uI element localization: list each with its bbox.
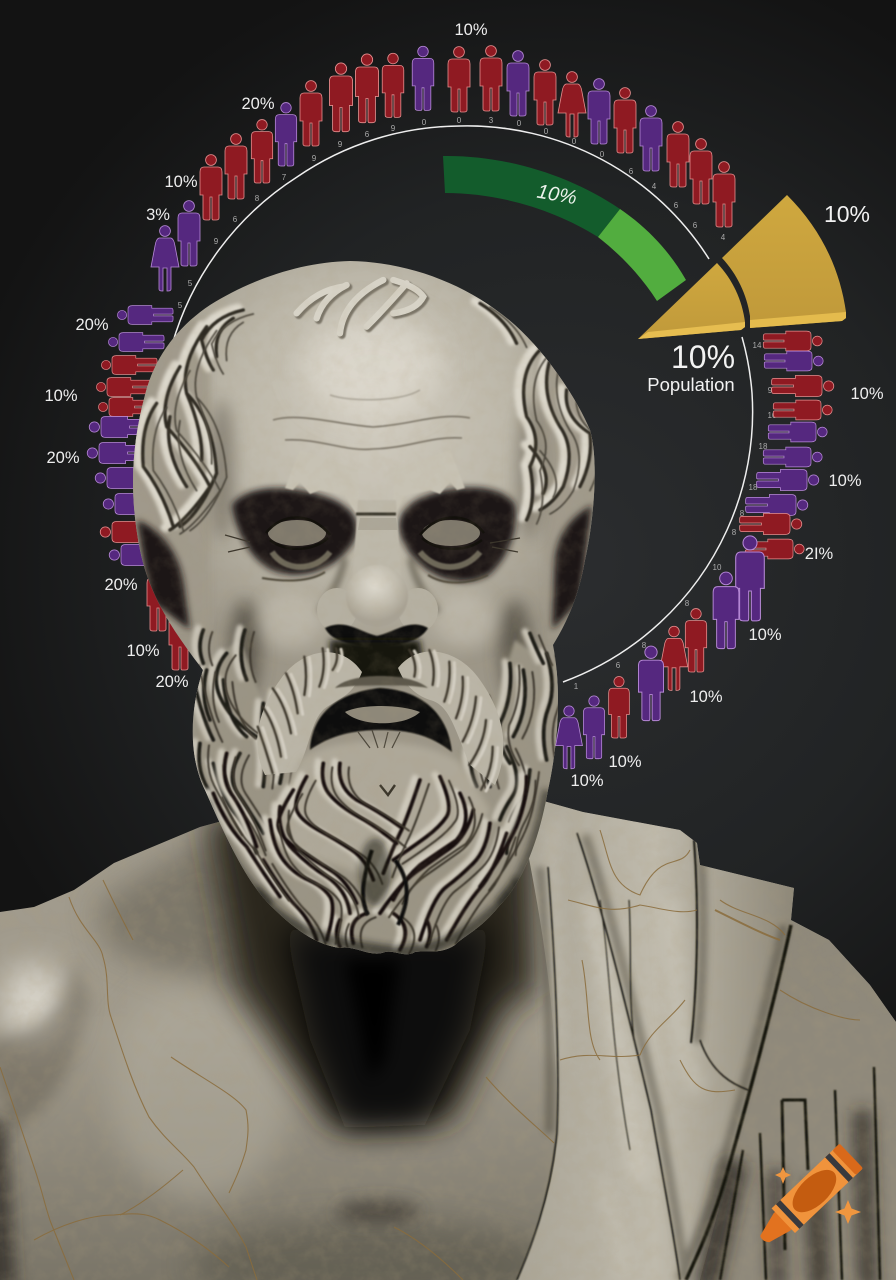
icon: crayon logo [751, 1144, 863, 1252]
small tick numbers: 10 [713, 563, 722, 572]
nose [317, 500, 438, 648]
small tick numbers: 9 [214, 237, 219, 246]
small tick numbers: 3 [489, 116, 494, 125]
head and beard [133, 261, 595, 954]
small tick numbers: 9 [338, 140, 343, 149]
marble veins [0, 830, 860, 1280]
small tick numbers: 8 [732, 528, 737, 537]
population label: Population [647, 374, 735, 395]
torso shading [0, 840, 550, 1280]
small tick numbers: 18 [749, 483, 758, 492]
percentage labels: 20% [104, 576, 138, 594]
toga speckle texture [528, 834, 880, 1280]
toga drapery [516, 802, 896, 1280]
percentage labels [44, 21, 884, 790]
small tick numbers: 9 [312, 154, 317, 163]
small tick numbers: 7 [282, 173, 287, 182]
people figures: left side [87, 306, 191, 670]
percentage labels: 10% [824, 201, 870, 227]
small tick numbers: 0 [517, 119, 522, 128]
small tick numbers: 1 [574, 682, 579, 691]
percentage labels: 20% [155, 673, 189, 691]
green arc segment [443, 156, 686, 301]
percentage labels: 10% [164, 173, 198, 191]
small tick numbers: 8 [642, 641, 647, 650]
torso speckle texture [0, 1002, 494, 1280]
toga fold lines [517, 833, 880, 1280]
brow highlights [284, 481, 466, 514]
percentage labels: 10% [608, 753, 642, 771]
percentage labels: 10% [126, 642, 160, 660]
small tick numbers: 6 [674, 201, 679, 210]
percentage labels: 3% [146, 206, 170, 224]
eyes [225, 517, 520, 583]
small tick numbers: 6 [629, 167, 634, 176]
small tick numbers: 0 [600, 150, 605, 159]
crayon body [751, 1144, 863, 1252]
small tick numbers: 14 [753, 341, 762, 350]
small tick numbers [178, 116, 777, 691]
population label: 10% [671, 339, 735, 375]
mustache [257, 648, 503, 791]
small tick numbers: 9 [391, 124, 396, 133]
green arc segment: 10% [535, 181, 578, 209]
torso [0, 802, 896, 1280]
hair tuft on crown [297, 280, 425, 335]
small tick numbers: 0 [572, 137, 577, 146]
small tick numbers: 8 [740, 509, 745, 518]
percentage labels: 10% [748, 626, 782, 644]
small tick numbers: 18 [759, 442, 768, 451]
small tick numbers: 4 [652, 182, 657, 191]
people figures: right side [556, 331, 834, 769]
small tick numbers: 8 [255, 194, 260, 203]
percentage labels: 20% [75, 316, 109, 334]
mouth [310, 676, 452, 752]
small tick numbers: 8 [685, 599, 690, 608]
small tick numbers: 9 [768, 386, 773, 395]
sparkle small [775, 1167, 791, 1184]
eye sockets [232, 487, 516, 581]
chin [275, 730, 490, 880]
neck shadow [205, 815, 535, 1128]
circle outline [172, 126, 753, 682]
percentage labels: 10% [454, 21, 488, 39]
people figures: top arc [151, 46, 735, 291]
percentage labels: 10% [44, 387, 78, 405]
small tick numbers: 6 [616, 661, 621, 670]
marble bust [0, 261, 896, 1280]
sparkle large [835, 1200, 861, 1224]
hair locks [138, 301, 601, 534]
small tick numbers: 5 [178, 301, 183, 310]
percentage labels: 10% [850, 385, 884, 403]
percentage labels: 10% [570, 772, 604, 790]
small tick numbers: 0 [457, 116, 462, 125]
forehead wrinkles [273, 390, 470, 449]
small tick numbers: 0 [544, 127, 549, 136]
side beard locks [185, 628, 561, 855]
small tick numbers: 6 [693, 221, 698, 230]
small tick numbers: 4 [721, 233, 726, 242]
beard base [195, 640, 560, 960]
percentage labels: 20% [241, 95, 275, 113]
percentage labels: 2I% [805, 545, 834, 563]
population label [647, 339, 735, 395]
marble speckle texture [144, 290, 591, 948]
gold pie wedges [638, 195, 846, 339]
dark recesses beside the head [137, 505, 592, 630]
percentage labels: 10% [689, 688, 723, 706]
lower beard locks [205, 751, 548, 954]
percentage labels: 20% [46, 449, 80, 467]
small tick numbers: 5 [188, 279, 193, 288]
small tick numbers: 10 [768, 411, 777, 420]
small tick numbers: 0 [422, 118, 427, 127]
toga fold shadows [540, 835, 784, 1280]
small tick numbers: 6 [233, 215, 238, 224]
temple and cheek shading [125, 315, 600, 700]
circular chart [44, 21, 884, 790]
percentage labels: 10% [828, 472, 862, 490]
small tick numbers: 6 [365, 130, 370, 139]
